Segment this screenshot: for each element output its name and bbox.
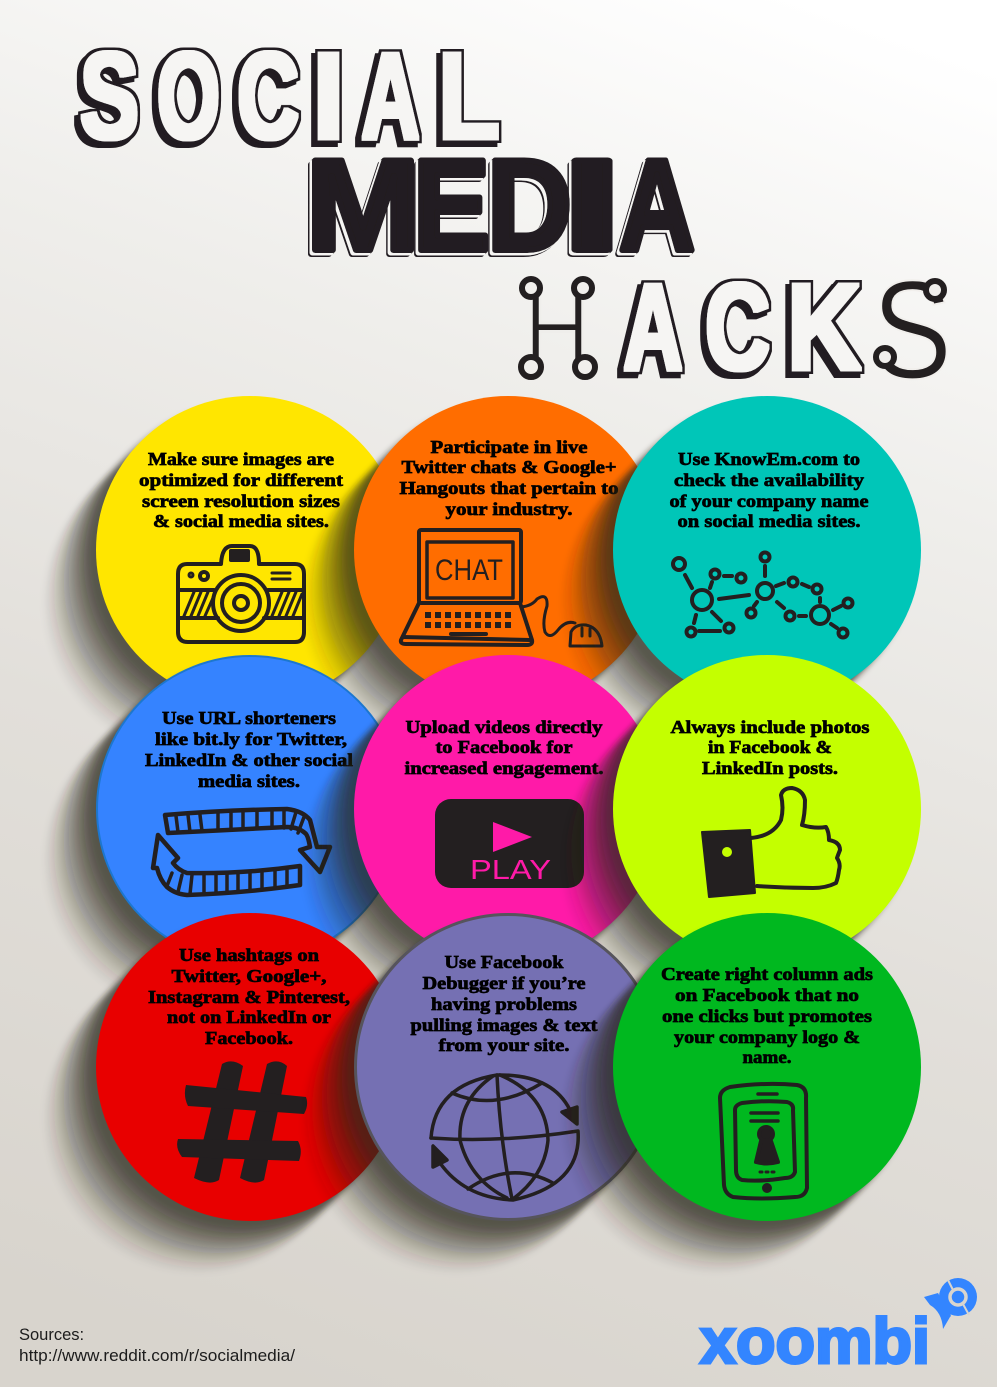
panel text: right column ads: Create right column ads [661, 964, 873, 984]
panel: Facebook Debugger (purple) [356, 914, 660, 1220]
panel text: optimize images: optimized for different [139, 470, 343, 490]
panel text: KnowEm: Use KnowEm.com to [678, 449, 860, 469]
title word: MEDIA: M [306, 132, 420, 278]
panel: upload videos (pink) [354, 655, 662, 963]
sources note: http://www.reddit.com/r/socialmedia/ [19, 1347, 295, 1365]
panel text: include photos: Always include photos [670, 717, 870, 737]
icon: mobile phone [720, 1084, 807, 1198]
panel: include photos (lime) [613, 655, 921, 963]
title word: HACKS: A [624, 260, 682, 396]
icon: network of nodes [673, 552, 852, 638]
sources note: Sources: [19, 1326, 84, 1344]
panel text: upload videos [404, 717, 604, 778]
icon: xoombi target mark [924, 1278, 977, 1329]
panel text: Facebook Debugger: having problems [431, 994, 577, 1014]
panel: optimize images (yellow) [96, 396, 404, 704]
panel text: right column ads: your company logo & [674, 1027, 860, 1047]
panel text: upload videos: to Facebook for [436, 737, 572, 757]
panel: URL shorteners (blue) [97, 656, 403, 962]
panel text: live chats [400, 437, 618, 519]
title word: HACKS: H [524, 268, 590, 391]
panel text: URL shorteners: media sites. [198, 771, 300, 791]
title word: MEDIA [306, 132, 695, 278]
title word: MEDIA: D [487, 132, 572, 278]
panel text: Facebook Debugger: pulling images & text [410, 1015, 598, 1035]
panel text: Facebook Debugger: Use Facebook [444, 952, 564, 972]
icon: play button [435, 799, 584, 888]
panel text: upload videos: increased engagement. [404, 758, 604, 778]
panel text: URL shorteners: Use URL shorteners [162, 708, 336, 728]
panel text: Facebook Debugger: Debugger if you’re [422, 973, 586, 993]
title word: SOCIAL: O [157, 28, 220, 166]
panel text: include photos: in Facebook & [708, 737, 832, 757]
panel text: right column ads: one clicks but promotes [662, 1006, 872, 1026]
panel text: live chats: Hangouts that pertain to [400, 478, 618, 498]
panel text: optimize images: screen resolution sizes [142, 491, 340, 511]
logo: xoombi: xoombi [700, 1305, 930, 1377]
icon: hashtag [177, 1061, 307, 1183]
panel text: hashtags: Twitter, Google+, [172, 966, 326, 986]
panel text: hashtags [148, 945, 350, 1048]
panel text: live chats: Twitter chats & Google+ [402, 457, 616, 477]
panel: KnowEm (teal) [613, 396, 921, 704]
panel text: right column ads: on Facebook that no [675, 985, 859, 1005]
title word: HACKS: S [872, 251, 952, 408]
panel text: hashtags: Facebook. [205, 1028, 293, 1048]
title word: SOCIAL: I [312, 28, 346, 166]
panel text: URL shorteners: LinkedIn & other social [145, 750, 353, 770]
panel text: Facebook Debugger: from your site. [438, 1035, 570, 1055]
panel text: include photos: LinkedIn posts. [702, 758, 838, 778]
icon: looping arrows [153, 809, 330, 895]
sources note [19, 1326, 295, 1365]
panel text: Facebook Debugger [410, 952, 598, 1055]
title word: HACKS [521, 251, 952, 408]
title word: MEDIA: A [619, 132, 695, 278]
icon: globe with arrows [431, 1075, 578, 1200]
panel text: live chats: your industry. [446, 499, 572, 519]
icon: laptop with chat screen and mouse [401, 530, 602, 646]
panel text: upload videos: Upload videos directly [406, 717, 602, 737]
icon: camera [178, 546, 304, 642]
icon label: CHAT: CHAT [435, 554, 503, 587]
panel: live chats (orange) [354, 396, 662, 704]
title word: MEDIA: E [413, 132, 490, 278]
panel text: live chats: Participate in live [430, 437, 588, 457]
panel text: optimize images [139, 449, 343, 531]
panel text: KnowEm: of your company name [670, 491, 869, 511]
title word: HACKS: C [705, 260, 770, 396]
panel: right column ads (green) [613, 913, 921, 1221]
title word: SOCIAL: A [362, 28, 420, 166]
panel text: hashtags: not on LinkedIn or [167, 1007, 331, 1027]
panel text: KnowEm: check the availability [674, 470, 864, 490]
panel text: KnowEm: on social media sites. [678, 511, 860, 531]
panel text: right column ads: name. [742, 1047, 792, 1067]
panel text: URL shorteners [145, 708, 353, 791]
title word: SOCIAL [80, 28, 500, 166]
title: Social Media Hacks [80, 28, 952, 408]
panel: hashtags (red) [96, 913, 404, 1221]
title word: MEDIA: I [562, 132, 622, 278]
title word: SOCIAL: C [237, 28, 299, 166]
title word: SOCIAL: L [438, 28, 500, 166]
panel text: hashtags: Instagram & Pinterest, [148, 987, 350, 1007]
panel text: right column ads [661, 964, 873, 1067]
icon label: PLAY: PLAY [470, 854, 551, 885]
title word: SOCIAL: S [80, 28, 139, 166]
title word: HACKS: K [787, 260, 861, 396]
panel text: optimize images: Make sure images are [148, 449, 334, 469]
logo: xoombi [700, 1278, 977, 1377]
panel text: hashtags: Use hashtags on [179, 945, 319, 965]
panel text: optimize images: & social media sites. [153, 511, 329, 531]
panel text: URL shorteners: like bit.ly for Twitter, [155, 729, 347, 749]
panel text: KnowEm [670, 449, 869, 531]
icon: thumbs up [702, 788, 840, 897]
panel text: include photos [670, 717, 870, 778]
